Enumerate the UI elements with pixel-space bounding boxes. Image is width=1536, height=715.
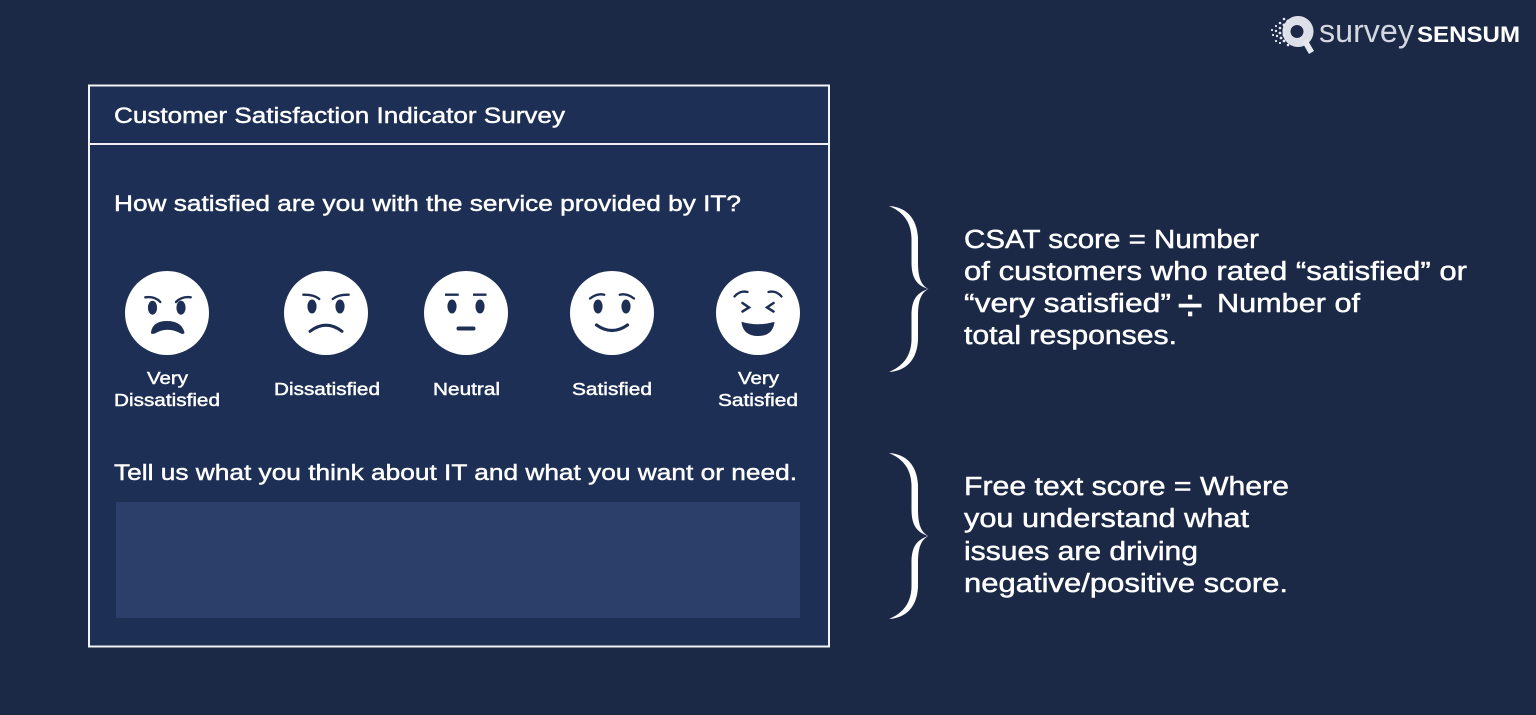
icon: satisfied face xyxy=(570,271,654,355)
text block: CSAT score formula: CSAT score = Number xyxy=(964,226,1260,254)
free text input box xyxy=(116,502,800,618)
label: very satisfied: Very xyxy=(738,368,779,388)
question: satisfaction: How satisfied are you with the service provided by IT? xyxy=(114,191,741,216)
text block: free text score: Free text score = Where xyxy=(964,473,1289,501)
label: dissatisfied: Dissatisfied xyxy=(274,379,380,399)
text block: CSAT score formula: of customers who rated “satisfied” or xyxy=(964,258,1468,286)
icon: very satisfied face xyxy=(716,271,800,355)
logo wordmark: survey xyxy=(1319,13,1414,49)
label: very dissatisfied xyxy=(114,368,220,410)
icon: dissatisfied face xyxy=(284,271,368,355)
icon: brace for free text score xyxy=(889,453,928,619)
label: very dissatisfied: Very xyxy=(147,368,188,388)
text block: CSAT score formula: “very satisfied” xyxy=(964,290,1171,318)
text block: free text score: negative/positive score. xyxy=(964,570,1288,598)
text block: free text score: you understand what xyxy=(964,505,1249,533)
icon: brace for CSAT score xyxy=(889,206,928,372)
panel header divider xyxy=(89,143,829,145)
text block: CSAT score formula xyxy=(964,226,1468,350)
text block: CSAT score formula: total responses. xyxy=(964,322,1177,350)
label: neutral: Neutral xyxy=(433,379,500,399)
question: free text prompt: Tell us what you think about IT and what you want or need. xyxy=(114,460,797,485)
logo: surveySENSUM xyxy=(1271,13,1520,54)
logo: surveySENSUM: SENSUM xyxy=(1417,22,1520,47)
text block: free text score xyxy=(964,473,1289,598)
label: very satisfied: Satisfied xyxy=(718,390,798,410)
icon: very dissatisfied face xyxy=(125,271,209,355)
heading: survey title: Customer Satisfaction Indicator Survey xyxy=(114,103,566,128)
divide symbol: ÷ xyxy=(1178,279,1203,331)
text block: CSAT score formula: Number of xyxy=(1217,290,1361,318)
label: satisfied: Satisfied xyxy=(572,379,652,399)
panel: survey card xyxy=(89,86,829,646)
label: very dissatisfied: Dissatisfied xyxy=(114,390,220,410)
icon: neutral face xyxy=(424,271,508,355)
label: very satisfied xyxy=(718,368,798,410)
text block: free text score: issues are driving xyxy=(964,538,1198,566)
icon: dotted Q xyxy=(1271,16,1314,54)
